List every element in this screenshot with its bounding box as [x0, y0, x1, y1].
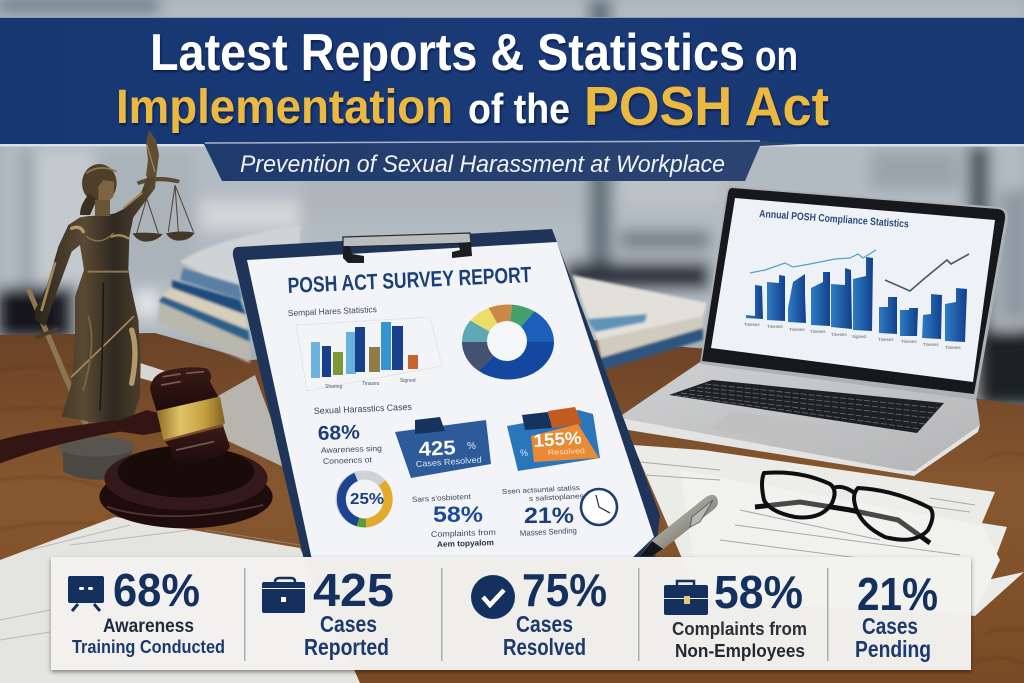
- icon: clock: [581, 489, 617, 525]
- stat: cases pending: 21%: [857, 568, 938, 620]
- title words: POSH Act: POSH Act: [584, 75, 829, 137]
- subtitle ribbon: Prevention of Sexual Harassment at Workplace: [240, 151, 725, 178]
- loose papers under clipboard: [0, 445, 1024, 683]
- card: 425 cases: 425: [418, 437, 456, 461]
- stat: cases pending: [855, 568, 938, 662]
- bottom statistics panel: [51, 557, 971, 670]
- clipboard title: POSH ACT SURVEY REPORT: [287, 262, 532, 298]
- donut chart: [462, 304, 554, 379]
- stat: cases reported: Cases: [320, 611, 377, 637]
- stat: cases resolved: [471, 564, 607, 660]
- stat: cases reported: 425: [313, 564, 394, 616]
- laptop lid: [700, 186, 1008, 400]
- stat: cases resolved: Resolved: [503, 634, 586, 660]
- laptop chart axis labels: Signed: [852, 334, 867, 339]
- subtitle ribbon: [203, 141, 800, 181]
- bar chart section heading: Sempal Hares Statistics: [288, 304, 377, 318]
- left stack of books: [157, 225, 300, 363]
- sword: [26, 288, 88, 426]
- clipboard bar chart: [296, 317, 442, 391]
- stat: 21% with clock: s salistoplanes: [529, 493, 585, 503]
- stat: 58%: Complaints from: [431, 528, 496, 539]
- justice statue: [26, 164, 195, 480]
- card: 155%: [507, 407, 600, 471]
- stat: cases pending: Pending: [855, 636, 931, 662]
- card: 155%: Resolved: [548, 446, 585, 457]
- stat: 58%: 58%: [433, 502, 483, 527]
- stat: 21% with clock: Ssen actsuntal statiss: [502, 485, 581, 496]
- gavel: [0, 367, 273, 528]
- top header banner: [0, 17, 1024, 146]
- ring chart: 25%: [340, 475, 388, 523]
- scales of justice: [133, 177, 195, 242]
- laptop chart axis labels: Tineses: [923, 342, 939, 347]
- icon: suitcase: [262, 578, 305, 613]
- stat: cases reported: [262, 564, 394, 660]
- statue staff tip over banner: [146, 130, 159, 178]
- stat: cases reported: Reported: [304, 634, 389, 660]
- eyeglasses: [755, 472, 933, 543]
- laptop chart axis labels: Tineses: [831, 332, 847, 337]
- laptop chart axis labels: Tineses: [789, 327, 805, 332]
- laptop screen title: Annual POSH Compliance Statistics: [759, 208, 909, 230]
- stat: cases resolved: Cases: [516, 611, 573, 637]
- right stack of papers: [572, 275, 707, 370]
- title words: of the: of the: [468, 85, 570, 132]
- title line two: Implementation: [116, 81, 453, 134]
- statue highlights: [42, 193, 142, 410]
- stat: awareness training: 68%: [113, 564, 200, 616]
- clipboard bar chart labels: Signed: [400, 378, 416, 384]
- stat: awareness training: [68, 564, 225, 657]
- laptop base and keyboard: [620, 362, 980, 476]
- clipboard paper: [247, 242, 654, 560]
- statue base: [58, 437, 135, 480]
- title word: on: on: [755, 32, 798, 79]
- gavel handle: [0, 410, 162, 463]
- card: 425 cases: [395, 417, 491, 478]
- clipboard bar chart labels: [325, 378, 416, 390]
- laptop chart axis labels: [744, 322, 961, 350]
- stat: 21% with clock: Masses Sending: [520, 526, 577, 538]
- statue figure: [35, 173, 156, 425]
- card: 155%: 155%: [533, 428, 582, 451]
- laptop chart axis labels: Tineses: [878, 337, 894, 342]
- clipboard board: [233, 229, 660, 560]
- stat: complaints from non-employees: Non-Employees: [675, 641, 805, 661]
- stat: 68%: Conoencs ot: [323, 455, 373, 466]
- card: 155%: %: [520, 448, 528, 458]
- stat: 58%: [412, 492, 496, 549]
- statue head: [80, 164, 117, 216]
- laptop: [620, 186, 1008, 476]
- laptop chart axis labels: Tineses: [810, 329, 826, 334]
- sounding block: [99, 446, 273, 528]
- stat: 68%: [317, 422, 382, 466]
- laptop chart axis labels: Tineses: [945, 345, 961, 350]
- stat: cases resolved: 75%: [522, 564, 607, 616]
- stat: 21% with clock: 21%: [524, 503, 574, 528]
- laptop chart axis labels: Tineses: [901, 339, 917, 344]
- laptop bar chart right: [879, 288, 967, 342]
- stat: cases pending: Cases: [862, 613, 918, 639]
- stat: 58%: Sars s'osbiotent: [412, 492, 472, 504]
- title line one: Latest Reports & Statistics: [150, 24, 745, 82]
- card: 425 cases: Cases Resolved: [415, 454, 482, 469]
- clipboard bar chart labels: Sharing: [325, 384, 342, 390]
- card: 425 cases: %: [467, 441, 476, 452]
- laptop line chart: [750, 250, 969, 291]
- stat: 68%: 68%: [317, 422, 360, 445]
- clipboard: [233, 229, 660, 560]
- stat: 58%: Aem topyalom: [437, 538, 494, 549]
- laptop chart axis labels: Tineses: [744, 322, 760, 327]
- wooden desk: [0, 333, 1024, 683]
- stat: complaints from non-employees: [664, 566, 807, 661]
- cases section heading: Sexual Harasstics Cases: [314, 402, 412, 416]
- icon: presentation board: [68, 576, 104, 611]
- laptop screen: [711, 198, 995, 382]
- folder behind gavel: [140, 363, 168, 385]
- stat: awareness training: Awareness: [103, 616, 194, 637]
- laptop chart axis labels: Tineses: [767, 324, 783, 329]
- blurred books and papers behind clipboard: [140, 225, 707, 470]
- icon: briefcase: [664, 581, 708, 615]
- stat: awareness training: Training Conducted: [72, 637, 225, 657]
- laptop bar chart left: [746, 257, 873, 331]
- stat: 68%: Awareness sing: [321, 444, 382, 455]
- stat: complaints from non-employees: Complaints from: [672, 619, 807, 639]
- clipboard metal clip: [343, 233, 472, 263]
- stat: 21% with clock: [502, 485, 617, 538]
- stat: complaints from non-employees: 58%: [714, 566, 803, 618]
- clipboard bar chart labels: Tinases: [362, 381, 380, 387]
- icon: check circle: [471, 575, 515, 619]
- pen: [640, 495, 718, 556]
- ring chart: 25%: 25%: [350, 491, 384, 508]
- gavel head: [150, 367, 230, 466]
